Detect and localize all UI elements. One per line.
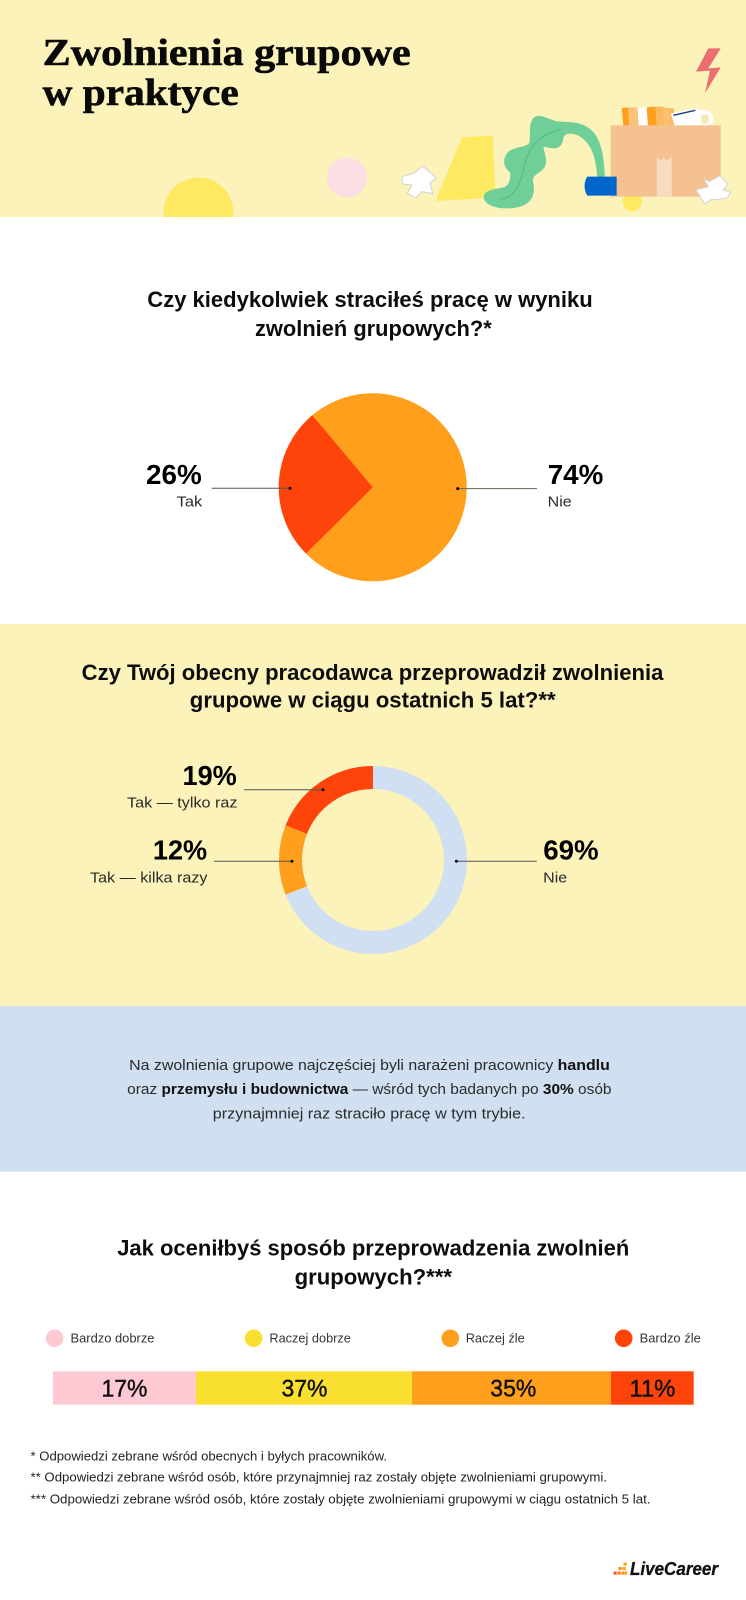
icon: crumpled paper right [696, 176, 731, 204]
text block: highlight: oraz przemysłu i budownictwa — wśród tych badanych po 30% osób [127, 1081, 611, 1098]
icon: plant [485, 117, 604, 208]
legend item: Raczej źle [442, 1330, 525, 1347]
icon: books in box [622, 107, 674, 125]
text block: highlight [127, 1057, 611, 1122]
icon: lightning bolt [696, 48, 721, 93]
heading: question 2 [82, 660, 664, 712]
callout: 12% Tak kilka razy [90, 834, 294, 886]
heading: question 3 [117, 1236, 629, 1289]
callout: 26% Tak: Tak [177, 494, 203, 511]
stacked bar chart [53, 1371, 694, 1405]
callout: 69% Nie: 69% [543, 834, 599, 865]
panel: question 2 [0, 624, 746, 1006]
donut chart: question 2 [290, 778, 456, 942]
bar segment: 37% [196, 1371, 412, 1405]
heading: question 1: Czy kiedykolwiek straciłeś pracę w wyniku [147, 287, 593, 312]
footnotes: *** Odpowiedzi zebrane wśród osób, które zostały objęte zwolnieniami grupowymi w ciągu ostatnich 5 lat. [30, 1491, 650, 1506]
callout: 26% Tak [146, 459, 292, 511]
callout: 19% Tak tylko raz: Tak — tylko raz [127, 795, 238, 812]
icon: pink circle [327, 158, 367, 198]
footnotes [30, 1449, 650, 1506]
heading: question 2: Czy Twój obecny pracodawca przeprowadził zwolnienia [82, 660, 664, 685]
footnotes: ** Odpowiedzi zebrane wśród osób, które przynajmniej raz zostały objęte zwolnieniami grupowymi. [30, 1470, 607, 1485]
panel: header [0, 0, 746, 217]
title: w praktyce [43, 72, 239, 114]
bar segment: 35% [412, 1371, 611, 1405]
callout: 74% Nie: 74% [548, 459, 603, 490]
bar segment: 17% [53, 1371, 196, 1405]
callout: 26% Tak: 26% [146, 459, 202, 490]
footnotes: * Odpowiedzi zebrane wśród obecnych i byłych pracowników. [30, 1449, 387, 1464]
callout: 19% Tak tylko raz: 19% [182, 760, 237, 791]
icon: mug [671, 108, 713, 125]
title [43, 32, 411, 114]
bar segment: 17%: 17% [102, 1376, 148, 1403]
title: Zwolnienia grupowe [43, 32, 411, 74]
illustration: fallen plant, box and papers [402, 48, 731, 211]
pie slice: Tak 26% [279, 415, 373, 554]
panel: highlight text [0, 1006, 746, 1172]
legend item: Raczej źle: Raczej źle [466, 1331, 525, 1346]
icon: cardboard box [611, 125, 721, 197]
icon: blue pot [585, 177, 617, 196]
legend item: Bardzo dobrze [46, 1330, 154, 1347]
icon: yellow half circle [164, 178, 234, 217]
callout: 74% Nie: Nie [548, 494, 572, 511]
legend item: Raczej dobrze: Raczej dobrze [269, 1331, 351, 1346]
heading: question 1: zwolnień grupowych?* [255, 316, 492, 341]
callout: 19% Tak tylko raz [127, 760, 324, 812]
callout: 12% Tak kilka razy: 12% [153, 834, 207, 865]
legend item: Bardzo dobrze: Bardzo dobrze [70, 1331, 154, 1346]
legend item: Bardzo źle: Bardzo źle [640, 1331, 701, 1346]
callout: 12% Tak kilka razy: Tak — kilka razy [90, 869, 208, 886]
heading: question 3: Jak oceniłbyś sposób przeprowadzenia zwolnień [117, 1236, 629, 1261]
legend item: Raczej dobrze [245, 1330, 351, 1347]
legend item: Bardzo źle [615, 1330, 701, 1347]
text block: highlight: Na zwolnienia grupowe najczęściej byli narażeni pracownicy handlu [129, 1057, 610, 1074]
callout: 69% Nie [455, 834, 599, 886]
bar segment: 35%: 35% [490, 1376, 536, 1403]
logo: LiveCareer: LiveCareer [630, 1559, 719, 1579]
icon: logo squares [614, 1562, 627, 1575]
pie chart: question 1 [279, 393, 467, 581]
heading: question 1 [147, 287, 593, 341]
heading: question 2: grupowe w ciągu ostatnich 5 lat?** [190, 688, 556, 712]
callout: 69% Nie: Nie [543, 869, 567, 886]
icon: crumpled paper left [402, 166, 437, 198]
text block: highlight: przynajmniej raz straciło pracę w tym trybie. [213, 1105, 526, 1122]
heading: question 3: grupowych?*** [295, 1264, 452, 1289]
callout: 74% Nie [456, 459, 603, 511]
icon: yellow circle behind box [623, 192, 642, 211]
bar segment: 37%: 37% [282, 1376, 328, 1403]
icon: yellow lampshade [436, 136, 496, 201]
bar segment: 11% [611, 1371, 694, 1405]
bar segment: 11%: 11% [629, 1376, 675, 1403]
legend [46, 1330, 701, 1347]
